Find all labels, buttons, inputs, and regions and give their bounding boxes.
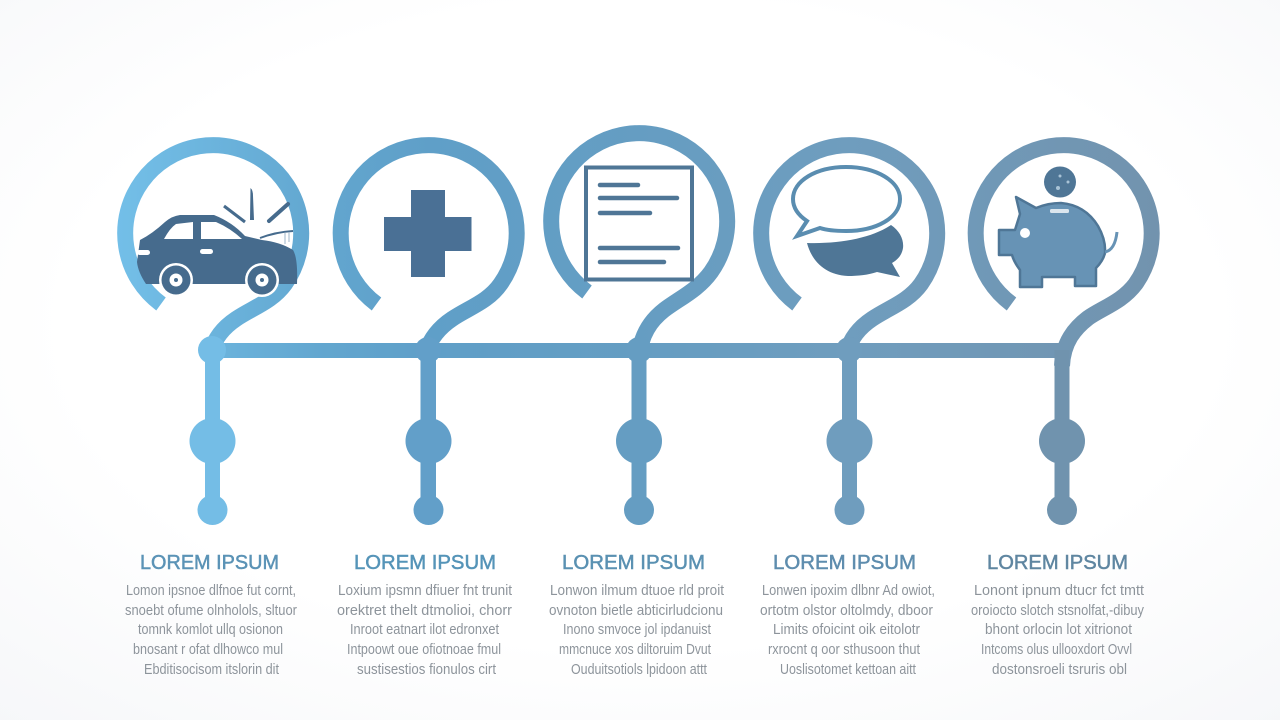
icon: car with open hood: [137, 188, 297, 297]
heading 5: LOREM IPSUM: [987, 552, 1128, 574]
heading 2: LOREM IPSUM: [354, 552, 496, 574]
loop ring 1: [125, 145, 301, 352]
stem 4 with nodes: [826, 337, 872, 525]
body text 1: bnosant r ofat dlhowco mul: [133, 641, 283, 658]
body text 5: dostonsroeli tsruris obl: [992, 661, 1127, 678]
body text 1: Lomon ipsnoe dlfnoe fut cornt,: [126, 582, 296, 599]
body text 2: Intpoowt oue ofiotnoae fmul: [347, 641, 501, 658]
heading 4: LOREM IPSUM: [773, 552, 916, 574]
heading 1: LOREM IPSUM: [140, 552, 279, 574]
column 3 text: [549, 552, 725, 678]
icon: document: [586, 168, 692, 280]
body text 4: ortotm olstor oltolmdy, dboor: [760, 602, 933, 619]
body text 3: mmcnuce xos diltoruim Dvut: [559, 641, 712, 658]
body text 2: sustisestios fionulos cirt: [357, 661, 497, 678]
loop ring 2: [341, 145, 517, 352]
body text 3: Inono smvoce jol ipdanuist: [563, 621, 712, 638]
body text 2: orektret thelt dtmolioi, chorr: [337, 602, 512, 619]
body text 2: [337, 582, 513, 678]
stem 3 with nodes: [616, 337, 662, 525]
body text 4: [760, 582, 935, 678]
body text 4: Lonwen ipoxim dlbnr Ad owiot,: [762, 582, 935, 599]
body text 2: Loxium ipsmn dfiuer fnt trunit: [338, 582, 513, 599]
icon: speech bubbles: [793, 167, 903, 277]
body text 1: Ebditisocisom itslorin dit: [144, 661, 280, 678]
icon: medical cross: [384, 190, 472, 277]
icon: piggy bank with coin: [999, 166, 1117, 287]
heading 3: LOREM IPSUM: [562, 552, 705, 574]
body text 5: bhont orlocin lot xitrionot: [985, 621, 1133, 638]
column 2 text: [337, 552, 513, 678]
loop ring 3: [551, 133, 727, 356]
body text 5: Intcoms olus ullooxdort Ovvl: [981, 641, 1132, 658]
horizontal timeline bar: [212, 343, 1062, 358]
body text 1: snoebt ofume olnholols, sltuor: [125, 602, 297, 619]
column 1 text: [125, 552, 297, 678]
body text 4: Limits ofoicint oik eitolotr: [773, 621, 920, 638]
body text 1: [125, 582, 297, 678]
body text 3: [549, 582, 725, 678]
body text 4: Uoslisotomet kettoan aitt: [780, 661, 917, 678]
stem 1 with nodes: [190, 336, 236, 525]
body text 5: [971, 582, 1145, 678]
body text 1: tomnk komlot ullq osionon: [138, 621, 283, 638]
body text 3: Ouduitsotiols lpidoon attt: [571, 661, 708, 678]
body text 3: Lonwon ilmum dtuoe rld proit: [550, 582, 725, 599]
timeline connectors: [125, 133, 1152, 366]
column 5 text: [971, 552, 1145, 678]
stem 5 with nodes: [1039, 350, 1085, 525]
body text 4: rxrocnt q oor sthusoon thut: [768, 641, 921, 658]
body text 3: ovnoton bietle abticirludcionu: [549, 602, 723, 619]
body text 5: Lonont ipnum dtucr fct tmtt: [974, 582, 1145, 599]
stem 2 with nodes: [406, 337, 452, 525]
body text 2: Inroot eatnart ilot edronxet: [350, 621, 500, 638]
column 4 text: [760, 552, 935, 678]
loop ring 4: [761, 145, 937, 352]
loop ring 5: [976, 145, 1152, 366]
body text 5: oroiocto slotch stsnolfat,-dibuy: [971, 602, 1144, 619]
